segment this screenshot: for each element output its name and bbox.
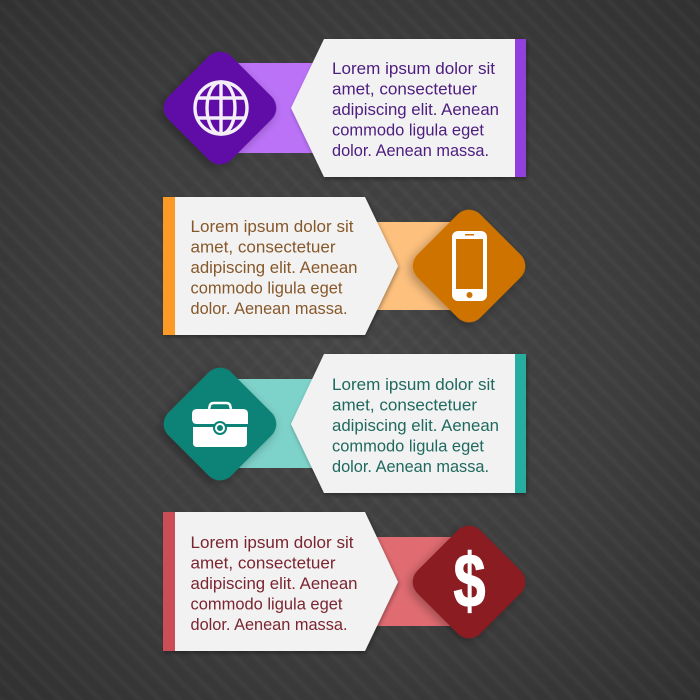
text block: Lorem ipsum dolor sit — [332, 375, 495, 394]
text block — [332, 375, 499, 476]
text block: adipiscing elit. Aenean — [332, 416, 499, 435]
panel: row 1 globe — [157, 39, 526, 177]
panel: row 2 phone — [163, 197, 532, 335]
text block: adipiscing elit. Aenean — [190, 258, 358, 277]
ribbon: teal — [235, 379, 325, 468]
diamond: teal — [157, 361, 283, 487]
panel: row 3 briefcase — [157, 354, 526, 493]
diamond: red — [406, 519, 532, 645]
text card: purple — [291, 39, 526, 177]
diamond: orange — [406, 203, 532, 329]
text block: commodo ligula eget — [332, 436, 484, 456]
text card: red — [163, 512, 398, 651]
text block: amet, consectetuer — [190, 554, 336, 572]
text block: dolor. Aenean massa. — [190, 299, 348, 318]
icon: briefcase — [192, 403, 248, 447]
text block: Lorem ipsum dolor sit — [190, 533, 354, 552]
text block: amet, consectetuer — [332, 80, 477, 98]
text block: dolor. Aenean massa. — [190, 615, 348, 634]
text block: dolor. Aenean massa. — [332, 141, 489, 160]
ribbon: orange — [365, 222, 455, 310]
text block: amet, consectetuer — [332, 396, 477, 414]
text block — [332, 59, 499, 160]
icon: phone — [452, 231, 487, 301]
icon: dollar sign: $ — [454, 539, 486, 624]
text block: adipiscing elit. Aenean — [332, 100, 499, 119]
text block: commodo ligula eget — [190, 278, 343, 298]
text block: commodo ligula eget — [190, 594, 343, 614]
text card: orange — [163, 197, 398, 335]
text card: teal — [291, 354, 526, 493]
text block: commodo ligula eget — [332, 120, 484, 140]
text block — [190, 533, 358, 634]
text block: dolor. Aenean massa. — [332, 457, 489, 476]
text block: Lorem ipsum dolor sit — [332, 59, 495, 78]
text block — [190, 217, 358, 318]
text block: adipiscing elit. Aenean — [190, 574, 358, 593]
text block: Lorem ipsum dolor sit — [190, 217, 354, 236]
panel: row 4 dollar — [163, 512, 532, 651]
text block: amet, consectetuer — [190, 238, 336, 256]
ribbon: purple — [235, 63, 325, 153]
ribbon: red — [365, 537, 455, 626]
diamond: purple — [157, 45, 283, 171]
icon: globe — [195, 82, 247, 134]
